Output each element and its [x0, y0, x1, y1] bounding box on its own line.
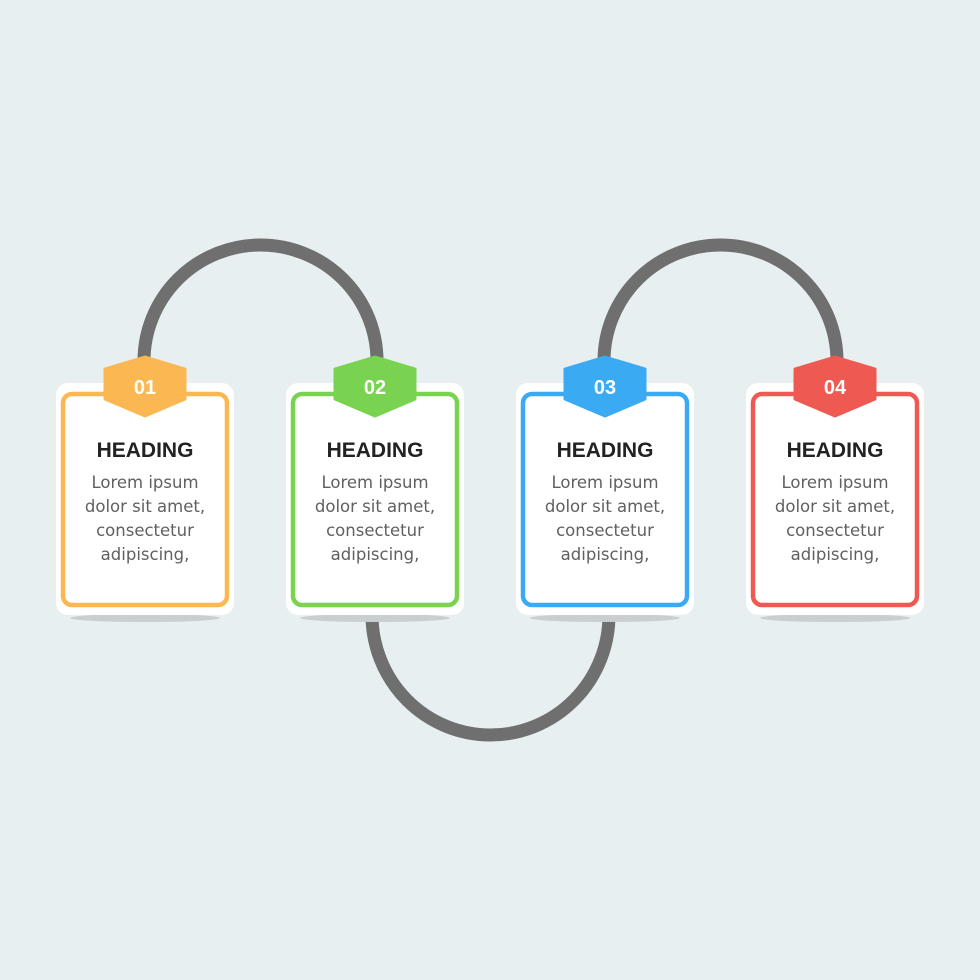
body 1: adipiscing,	[101, 545, 189, 564]
badge 03: 03	[594, 377, 616, 399]
step 4 card	[746, 357, 924, 622]
badge 01: 01	[134, 377, 156, 399]
body 1: consectetur	[96, 521, 194, 540]
body 3: adipiscing,	[561, 545, 649, 564]
badge 03	[565, 357, 645, 416]
body 4	[775, 473, 895, 564]
heading 4: HEADING	[787, 439, 883, 462]
badge 04: 04	[824, 377, 847, 399]
body 2: Lorem ipsum	[321, 473, 429, 492]
body 4: Lorem ipsum	[781, 473, 889, 492]
step 3 card	[516, 357, 694, 622]
body 3: dolor sit amet,	[545, 497, 665, 516]
step 1 card	[56, 357, 234, 622]
body 1	[85, 473, 205, 564]
body 4: consectetur	[786, 521, 884, 540]
badge 02: 02	[364, 377, 386, 399]
body 2: consectetur	[326, 521, 424, 540]
connector: top arc 1	[144, 245, 377, 372]
body 1: dolor sit amet,	[85, 497, 205, 516]
body 3: consectetur	[556, 521, 654, 540]
step 2 card	[286, 357, 464, 622]
heading 2: HEADING	[327, 439, 423, 462]
heading 1: HEADING	[97, 439, 193, 462]
body 2: adipiscing,	[331, 545, 419, 564]
heading 3: HEADING	[557, 439, 653, 462]
connector: bottom arc	[372, 605, 609, 735]
badge 04	[795, 357, 875, 416]
badge 01	[105, 357, 185, 416]
body 2	[315, 473, 435, 564]
body 3: Lorem ipsum	[551, 473, 659, 492]
body 4: adipiscing,	[791, 545, 879, 564]
badge 02	[335, 357, 415, 416]
body 2: dolor sit amet,	[315, 497, 435, 516]
connector: top arc 2	[604, 245, 837, 372]
body 1: Lorem ipsum	[91, 473, 199, 492]
body 3	[545, 473, 665, 564]
body 4: dolor sit amet,	[775, 497, 895, 516]
